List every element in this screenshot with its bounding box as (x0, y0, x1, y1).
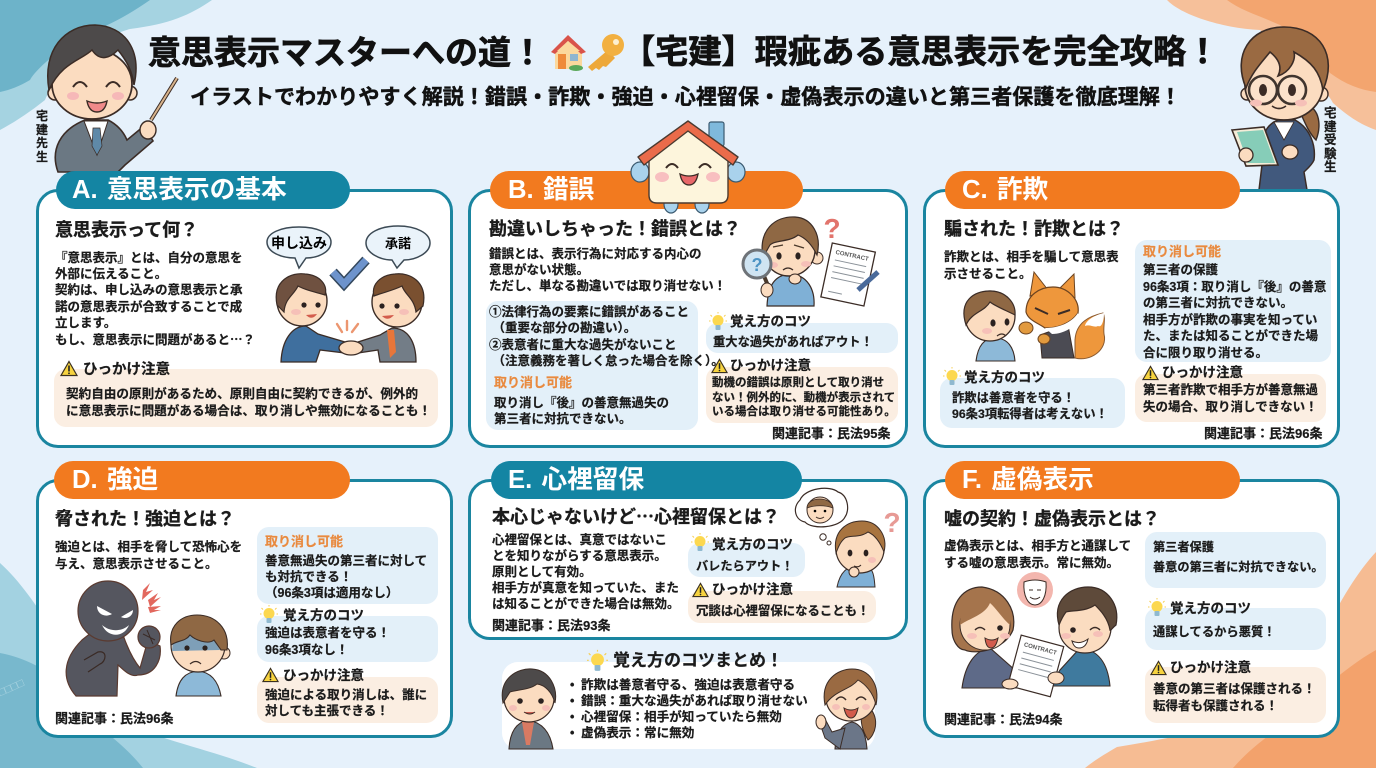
explanation text: 諾の意思表示が合致することで成 (55, 300, 242, 314)
caution box (1135, 374, 1326, 422)
explanation text: は知ることができた場合は無効。 (492, 597, 680, 611)
question heading: 勘違いしちゃった！錯誤とは？ (489, 219, 741, 239)
explanation text (55, 250, 255, 348)
illustration: handshake with speech bubbles: 承諾 (385, 236, 411, 251)
explanation text: 意思がない状態。 (489, 263, 589, 277)
caution heading: ひっかけ注意 (83, 362, 170, 378)
protection text: 第三者の保護 (1143, 263, 1218, 277)
character: student small (815, 665, 880, 750)
icon: bulb (260, 605, 278, 623)
caution heading: ひっかけ注意 (712, 582, 793, 597)
third party text (1153, 537, 1324, 577)
tip heading: 覚え方のコツ (964, 370, 1045, 385)
tip text (265, 626, 390, 657)
explanation text (489, 247, 726, 293)
protection box (1135, 240, 1331, 362)
cancellable text: （96条3項は適用なし） (265, 586, 398, 600)
icon: warning (711, 358, 728, 374)
related article: 関連記事：民法95条 (772, 426, 890, 441)
panel: C 詐欺 (923, 171, 1340, 448)
icon: house and key (551, 34, 624, 71)
protection text: 合に限り取り消せる。 (1143, 346, 1268, 360)
caution text: 第三者詐欺で相手方が善意無過 (1143, 383, 1318, 397)
explanation text: 与え、意思表示させること。 (55, 556, 218, 570)
related article: 関連記事：民法94条 (944, 712, 1062, 727)
protection text: の第三者に対抗できない。 (1143, 296, 1293, 310)
caution text (66, 386, 431, 418)
illustration: person thinking: ? (883, 507, 901, 538)
caution box (54, 369, 438, 427)
explanation text: 強迫とは、相手を脅して恐怖心を (55, 540, 242, 554)
protection text: た、または知ることができた場 (1143, 329, 1318, 343)
summary list: • (570, 710, 574, 724)
explanation text (492, 532, 680, 611)
explanation text: 立します。 (55, 316, 116, 330)
summary heading: 覚え方のコツまとめ！ (613, 651, 783, 670)
caution text (265, 688, 427, 718)
caution box (257, 677, 438, 723)
panel: D 強迫 (36, 461, 453, 738)
tip box (940, 378, 1125, 428)
caution text (712, 376, 896, 418)
caution text (1143, 382, 1318, 414)
related article: 関連記事：民法96条 (1204, 426, 1322, 441)
icon: warning (1150, 660, 1167, 676)
cancellable box (257, 527, 438, 604)
conditions text: （注意義務を著しく怠った場合を除く）。 (492, 354, 724, 368)
caution box (706, 367, 898, 423)
heading pill B (490, 171, 803, 209)
illustration: confused person with magnifier and contract: ? (823, 213, 841, 244)
summary list: • (570, 694, 574, 708)
conditions text: ②表意者に重大な過失がないこと (489, 338, 677, 352)
illustration: handshake with speech bubbles (266, 225, 431, 363)
related article: 関連記事：民法96条 (55, 711, 173, 726)
question heading: 騙された！詐欺とは？ (944, 219, 1124, 239)
teacher label: 宅建先生 (36, 109, 48, 164)
heading pill E (491, 461, 802, 499)
tip heading: 覚え方のコツ (283, 608, 364, 623)
illustration: person thinking (794, 488, 901, 588)
caution box (1145, 667, 1326, 723)
character: teacher small (502, 665, 562, 750)
conditions box (486, 301, 698, 430)
summary list: 虚偽表示：常に無効 (581, 726, 694, 740)
tip text: 詐欺は善意者を守る！ (952, 391, 1075, 405)
icon: bulb (709, 312, 727, 330)
heading pill F (945, 461, 1240, 499)
icon: warning (60, 360, 78, 376)
explanation text: 詐欺とは、相手を騙して意思表 (944, 250, 1119, 264)
tip heading: 覚え方のコツ (730, 314, 811, 329)
heading pill C: C. 詐欺 (962, 176, 1048, 204)
heading pill A (56, 171, 350, 209)
summary list (570, 677, 808, 741)
summary list: 錯誤：重大な過失があれば取り消せない (581, 694, 808, 708)
cancellable text: 第三者に対抗できない。 (494, 412, 632, 426)
caution text: 冗談は心裡留保になることも！ (696, 604, 869, 618)
explanation text: もし、意思表示に問題があると…？ (55, 329, 255, 348)
tip text (952, 391, 1108, 421)
protection text: 96条3項：取り消し『後』の善意 (1143, 280, 1326, 294)
icon: bulb (691, 533, 709, 551)
icon: bulb (1148, 598, 1166, 618)
summary list: • (570, 678, 574, 692)
illustration: boy and fox (963, 270, 1106, 362)
heading pill A: A. 意思表示の基本 (72, 176, 287, 204)
question heading: 脅された！強迫とは？ (55, 509, 235, 529)
caution heading: ひっかけ注意 (1162, 365, 1243, 380)
heading pill B: B. 錯誤 (508, 176, 594, 204)
panel: A 意思表示の基本 (36, 171, 453, 448)
cancellable text: 善意無過失の第三者に対して (265, 554, 427, 568)
caution box (688, 591, 876, 623)
cancellable label: 取り消し可能 (494, 375, 572, 390)
icon: warning (692, 582, 709, 598)
caution text: 強迫による取り消しは、誰に (265, 688, 427, 702)
summary white box (502, 662, 875, 749)
icon: warning (262, 667, 279, 682)
explanation text: 示させること。 (944, 267, 1032, 281)
tip box (688, 543, 805, 577)
caution text: 対しても主張できる！ (265, 704, 389, 718)
tip heading: 覚え方のコツ (1170, 601, 1251, 616)
title text right: 【宅建】瑕疵ある意思表示を完全攻略！ (622, 34, 1219, 71)
explanation text: 原則として有効。 (492, 565, 592, 579)
related article: 関連記事：民法93条 (492, 618, 610, 633)
question heading: 本心じゃないけど…心裡留保とは？ (492, 503, 780, 529)
heading pill E: E. 心裡留保 (508, 466, 644, 494)
panel: F 虚偽表示 (923, 461, 1340, 738)
explanation text (944, 250, 1119, 281)
conditions text: （重要な部分の勘違い）。 (492, 321, 636, 335)
heading pill F: F. 虚偽表示 (962, 466, 1094, 494)
icon: warning (1142, 365, 1159, 380)
third party text: 第三者保護 (1153, 540, 1214, 554)
caution text: 動機の錯誤は原則として取り消せ (712, 377, 884, 389)
explanation text: する嘘の意思表示。常に無効。 (944, 556, 1119, 570)
cancellable label: 取り消し可能 (265, 534, 343, 549)
heading pill D (54, 461, 350, 499)
cancellable text: も対抗できる！ (265, 570, 352, 584)
explanation text: 外部に伝えること。 (55, 267, 167, 281)
summary list: 詐欺は善意者守る、強迫は表意者守る (581, 678, 795, 692)
illustration: conspirators signing a contract (950, 570, 1120, 700)
caution text (1153, 681, 1316, 715)
tip text: 強迫は表意者を守る！ (265, 626, 390, 640)
caution heading: ひっかけ注意 (1170, 660, 1251, 675)
caution text: 善意の第三者は保護される！ (1153, 682, 1316, 696)
panel: E 心裡留保 (468, 461, 908, 640)
character: student (1230, 26, 1330, 189)
illustration: conspirators signing a contract: CONTRACT (1023, 642, 1057, 657)
student label: 宅建受験生 (1324, 106, 1337, 174)
character: teacher (47, 24, 179, 173)
summary list: 心裡留保：相手が知っていたら無効 (581, 710, 782, 724)
caution text: 転得者も保護される！ (1153, 699, 1278, 713)
illustration: confused person with magnifier and contract: ? (752, 255, 762, 275)
tip heading: 覚え方のコツ (712, 537, 793, 552)
caution text: ない！例外的に、動機が表示されて (712, 392, 895, 404)
cancellable text (494, 396, 669, 426)
explanation text: とを知りながらする意思表示。 (492, 549, 667, 563)
tip box (257, 616, 438, 662)
explanation text (55, 540, 242, 570)
tip box (1145, 608, 1326, 650)
illustration: shadow figure threatening boy (66, 580, 230, 697)
tip text: 96条3項なし！ (265, 643, 348, 657)
explanation text (944, 538, 1131, 572)
heading pill D: D. 強迫 (72, 466, 158, 494)
third party text: 善意の第三者に対抗できない。 (1153, 560, 1324, 574)
heading pill C (945, 171, 1240, 209)
cancellable text (265, 554, 427, 600)
tip text: 96条3項転得者は考えない！ (952, 407, 1108, 421)
question heading: 意思表示って何？ (55, 220, 198, 240)
subtitle: イラストでわかりやすく解説！錯誤・詐欺・強迫・心裡留保・虚偽表示の違いと第三者保護を徹底理解！ (190, 86, 1181, 109)
explanation text: 『意思表示』とは、自分の意思を (55, 251, 243, 265)
explanation text: 心裡留保とは、真意ではないこ (492, 533, 667, 547)
explanation text: 錯誤とは、表示行為に対応する内心の (489, 247, 702, 261)
panel: B 錯誤 (468, 171, 908, 448)
summary list: • (570, 726, 574, 740)
conditions text: ①法律行為の要素に錯誤があること (489, 305, 689, 319)
caution heading: ひっかけ注意 (730, 358, 811, 373)
caution text: いる場合は取り消せる可能性あり。 (712, 406, 896, 418)
mascot: house character (630, 115, 746, 215)
explanation text: 虚偽表示とは、相手方と通謀して (944, 539, 1131, 553)
protection text (1143, 263, 1326, 360)
title text left: 意思表示マスターへの道！ (148, 34, 544, 71)
tip text: 重大な過失があればアウト！ (713, 335, 873, 349)
protection text: 相手方が詐欺の事実を知ってい (1143, 312, 1317, 326)
explanation text: 相手方が真意を知っていた、また (492, 581, 679, 595)
explanation text: 契約は、申し込みの意思表示と承 (55, 283, 243, 297)
title (148, 34, 1219, 71)
tip box (706, 323, 898, 353)
icon: bulb (587, 649, 608, 674)
tip text: 通謀してるから悪質！ (1153, 625, 1276, 639)
explanation text: ただし、単なる勘違いでは取り消せない！ (489, 279, 726, 293)
question heading: 嘘の契約！虚偽表示とは？ (944, 509, 1160, 529)
caution text: 失の場合、取り消しできない！ (1143, 400, 1318, 414)
illustration: confused person with magnifier and contract: CONTRACT (835, 250, 869, 263)
conditions text (489, 304, 724, 368)
cancellable label: 取り消し可能 (1143, 244, 1221, 259)
caution text: 契約自由の原則があるため、原則自由に契約できるが、例外的 (66, 387, 418, 401)
third party box (1145, 532, 1326, 588)
illustration: confused person with magnifier and contract (742, 213, 880, 307)
illustration: handshake with speech bubbles: 申し込み (271, 235, 327, 251)
tip text: バレたらアウト！ (696, 559, 794, 573)
caution heading: ひっかけ注意 (283, 668, 364, 683)
panel: summary of tips (502, 650, 878, 750)
icon: bulb (943, 367, 961, 385)
cancellable text: 取り消し『後』の善意無過失の (494, 396, 669, 410)
caution text: に意思表示に問題がある場合は、取り消しや無効になることも！ (66, 404, 431, 418)
